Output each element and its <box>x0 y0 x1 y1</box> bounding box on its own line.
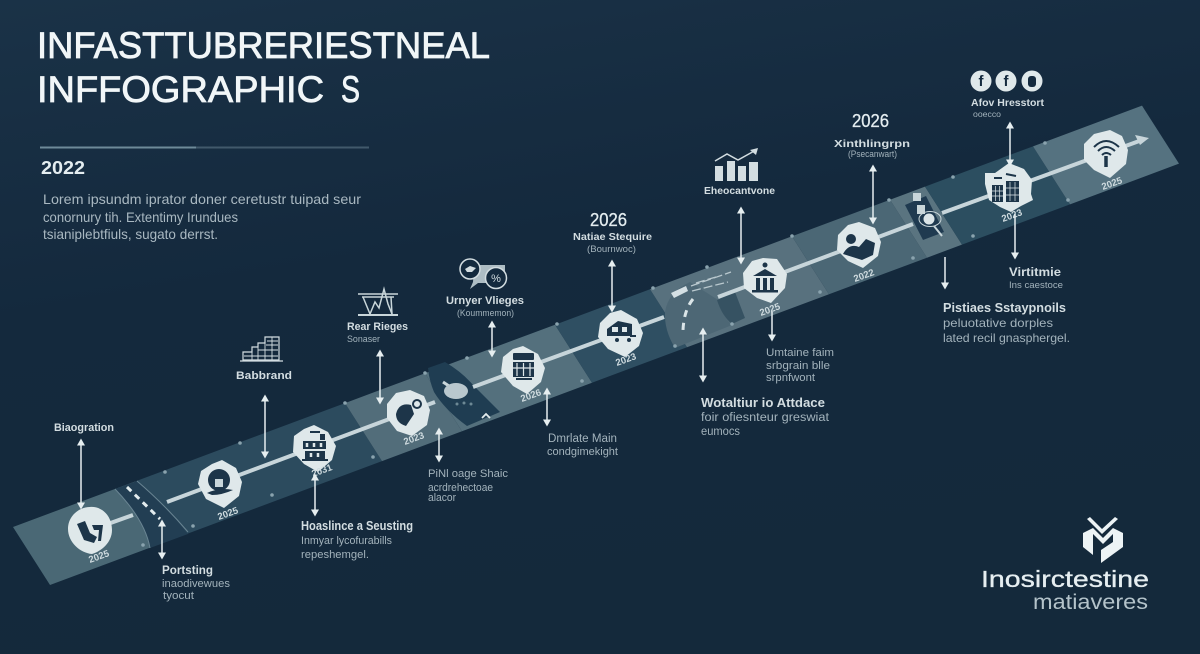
label: PiNl oage Shaic: alacor <box>428 492 456 504</box>
label: Umtaine faim: Umtaine faim <box>766 347 834 359</box>
icon: social badges: f <box>978 73 984 90</box>
icon: social badges: f <box>1004 73 1010 90</box>
label: Dmrlate Main: condgimekight <box>547 446 618 458</box>
icon: train <box>513 353 534 380</box>
milestone 9 <box>985 163 1033 225</box>
milestone 6 <box>598 310 643 369</box>
label: Hoaslince a Seusting: repeshemgel. <box>301 549 369 561</box>
brand tagline: matiaveres <box>1033 591 1148 614</box>
label: Afov Hresstort: ooecco <box>973 109 1001 119</box>
icon: wifi <box>1094 141 1119 167</box>
label: Portsting: Portsting <box>162 563 213 577</box>
year 2026: 2026 <box>519 387 543 405</box>
label: Hoaslince a Seusting <box>301 518 413 561</box>
icon: chat percent: % <box>491 273 501 285</box>
milestone 2 <box>198 460 242 523</box>
label: 2026 Xinthlingrpn: (Psecanwart) <box>848 149 897 159</box>
label: Pistiaes Sstaypnoils: lated recil gnasphergel. <box>943 331 1070 345</box>
label: Babbrand: Babbrand <box>236 370 292 382</box>
icon: padlock <box>207 469 233 495</box>
dark break element 2 <box>428 362 500 426</box>
label: PiNl oage Shaic: acrdrehectoae <box>428 482 493 494</box>
icon: factory <box>302 431 328 461</box>
year 2023: 2023 <box>1000 207 1024 225</box>
icon: bank <box>752 262 778 292</box>
icon: logo mark <box>1083 517 1123 563</box>
title: S <box>341 69 360 110</box>
icon: people <box>843 234 875 260</box>
timeline line <box>105 135 1149 525</box>
label: Dmrlate Main: Dmrlate Main <box>548 433 617 445</box>
label: 2026 Xinthlingrpn: 2026 <box>852 111 889 131</box>
icon: globe and gear <box>396 400 421 426</box>
connector arrows <box>81 125 1015 556</box>
title: INFFOGRAPHIC <box>37 69 324 110</box>
year 2023: 2023 <box>402 430 426 448</box>
label: 2026 Xinthlingrpn <box>834 111 910 159</box>
signpost element <box>905 193 944 240</box>
icon: skyline chart <box>240 337 283 361</box>
label: Pistiaes Sstaypnoils: Pistiaes Sstaypnoils <box>943 300 1066 315</box>
label: Wotaltiur io Attdace: foir ofiesnteur greswiat <box>701 412 830 424</box>
label: Urnyer Vlieges <box>446 295 524 319</box>
label: Afov Hresstort: Afov Hresstort <box>971 97 1044 109</box>
label: Portsting <box>162 563 231 602</box>
label: Dmrlate Main <box>547 433 618 458</box>
year 2022: 2022 <box>852 267 876 285</box>
year 2025: 2025 <box>87 548 112 566</box>
label: Wotaltiur io Attdace: Wotaltiur io Attdace <box>701 395 825 410</box>
label: Umtaine faim: srpnfwont <box>766 372 815 384</box>
label: Rear Rieges: Sonaser <box>347 334 380 345</box>
diagonal timeline ribbon <box>13 106 1179 585</box>
label: PiNl oage Shaic <box>428 468 508 504</box>
label: Rear Rieges: Rear Rieges <box>347 321 408 333</box>
milestone 5 <box>501 346 545 405</box>
label: Pistiaes Sstaypnoils <box>943 300 1070 345</box>
intro block: Lorem ipsundm iprator doner ceretustr tuipad seur <box>43 191 361 207</box>
milestone 3 <box>293 425 336 480</box>
intro block <box>40 146 369 242</box>
label: Afov Hresstort <box>971 97 1044 119</box>
label: Eheocantvone: Eheocantvone <box>704 185 775 197</box>
label: 2026 Natiae Stequire: (Bournwoc) <box>587 244 636 255</box>
icon: chat percent <box>460 259 506 289</box>
icon: mountain bridge <box>358 289 398 315</box>
milestone 8 <box>837 222 881 285</box>
icon: growth bars <box>715 148 758 181</box>
year 2023: 2023 <box>614 351 638 369</box>
milestone 4 <box>387 390 430 448</box>
icon: social badges <box>970 70 1042 92</box>
label: Umtaine faim <box>766 347 834 384</box>
label: 2026 Natiae Stequire <box>573 210 652 255</box>
year 2025: 2025 <box>758 301 783 319</box>
label: Urnyer Vlieges: (Koummemon) <box>457 308 514 319</box>
label: Virtitmie <box>1009 265 1063 291</box>
label: Portsting: inaodivewues <box>162 578 231 590</box>
label: Hoaslince a Seusting: Inmyar lycofurabills <box>301 535 392 547</box>
title <box>37 25 490 110</box>
milestone 7 <box>743 258 787 319</box>
icon: city buildings <box>992 174 1019 202</box>
label: Wotaltiur io Attdace: eumocs <box>701 426 740 438</box>
road break 1 <box>115 481 188 548</box>
milestone 1 <box>68 507 112 566</box>
ribbon rivets <box>141 141 1070 547</box>
milestone 10 <box>1084 130 1128 193</box>
label: Wotaltiur io Attdace <box>701 395 830 438</box>
intro block: 2022 <box>41 158 85 178</box>
label: Rear Rieges <box>347 321 408 345</box>
label: Urnyer Vlieges: Urnyer Vlieges <box>446 295 524 307</box>
label: 2026 Natiae Stequire: 2026 <box>590 210 627 230</box>
intro block: tsianiplebtfiuls, sugato derrst. <box>43 226 218 242</box>
icon: tools <box>77 521 103 543</box>
label: Virtitmie: Virtitmie <box>1009 265 1061 279</box>
label: Hoaslince a Seusting: Hoaslince a Seusting <box>301 518 413 533</box>
year 2025: 2025 <box>1100 175 1125 193</box>
year 2031: 2031 <box>310 462 335 480</box>
label: 2026 Xinthlingrpn: Xinthlingrpn <box>834 138 910 150</box>
label: Portsting: tyocut <box>163 590 194 602</box>
logo <box>981 517 1149 614</box>
label: 2026 Natiae Stequire: Natiae Stequire <box>573 231 652 243</box>
label: Pistiaes Sstaypnoils: peluotative dorples <box>943 316 1053 330</box>
label: Umtaine faim: srbgrain blle <box>766 360 830 372</box>
label: PiNl oage Shaic: PiNl oage Shaic <box>428 468 508 480</box>
icon: house vehicle <box>607 321 636 342</box>
winding road element <box>665 272 745 348</box>
brand name: Inosirctestine <box>981 566 1149 592</box>
label: Biogration: Biaogration <box>54 422 114 434</box>
label: Virtitmie: Ins caestoce <box>1009 280 1063 291</box>
intro block: conornury tih. Extentimy Irundues <box>43 209 238 225</box>
year 2025: 2025 <box>216 505 241 523</box>
title: INFASTTUBRERIESTNEAL <box>37 25 490 66</box>
